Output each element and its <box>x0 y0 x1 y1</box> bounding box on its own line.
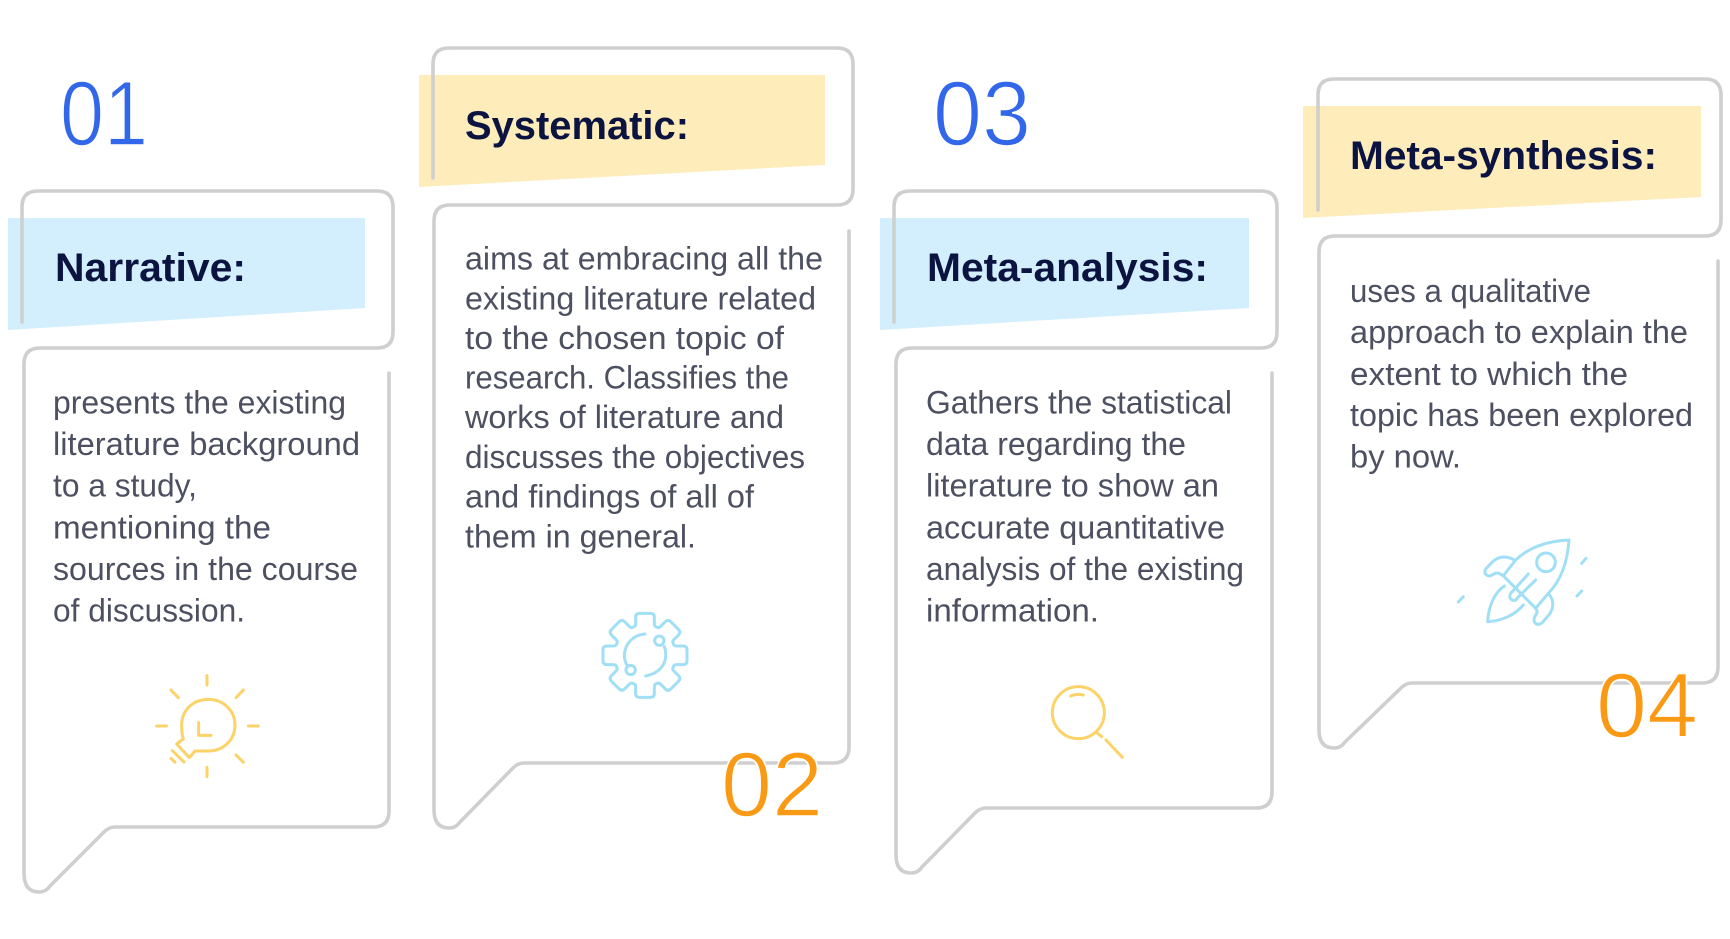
text block: Meta-analysis description: accurate quantitative <box>926 510 1225 546</box>
text block: Narrative description: sources in the course <box>53 551 358 587</box>
text block: Systematic description: them in general. <box>465 518 696 554</box>
card outline: Narrative <box>22 191 393 892</box>
text block: Meta-synthesis description: extent to which the <box>1350 356 1628 392</box>
card outline: Meta-analysis <box>894 191 1277 873</box>
icon: light bulb with clock <box>157 676 258 777</box>
text block: Systematic description: discusses the objectives <box>465 439 805 475</box>
text block: Systematic description: and findings of all of <box>465 478 754 514</box>
number 03: 03 <box>933 63 1031 165</box>
heading: Narrative: Narrative: <box>55 246 246 290</box>
text block: Meta-analysis description: data regarding the <box>926 426 1186 462</box>
text block: Systematic description: research. Classifies the <box>465 360 789 396</box>
text block: Systematic description: works of literature and <box>464 399 784 435</box>
number 02: 02 <box>721 734 823 836</box>
panel: Narrative card <box>8 63 393 892</box>
text block: Meta-synthesis description <box>1350 273 1693 474</box>
heading band: Meta-analysis <box>880 218 1249 330</box>
text block: Meta-synthesis description: topic has been explored <box>1350 397 1693 433</box>
number 04: 04 <box>1596 655 1698 757</box>
text block: Systematic description: aims at embracing all the <box>465 240 823 276</box>
panel: Systematic card <box>419 48 853 836</box>
card outline: Meta-synthesis <box>1318 79 1721 748</box>
text block: Narrative description: to a study, <box>53 468 197 504</box>
panel: Meta-analysis card <box>880 63 1277 873</box>
text block: Systematic description <box>464 240 823 554</box>
text block: Meta-synthesis description: approach to explain the <box>1350 314 1688 350</box>
text block: Meta-analysis description: literature to show an <box>926 468 1219 504</box>
text block: Meta-analysis description <box>926 384 1244 628</box>
icon: rocket <box>1458 540 1586 624</box>
heading: Meta-synthesis: Meta-synthesis: <box>1350 134 1657 178</box>
text block: Meta-synthesis description: uses a qualitative <box>1350 273 1591 309</box>
panel: Meta-synthesis card <box>1303 79 1721 757</box>
icon: gear <box>603 613 687 697</box>
heading band: Narrative <box>8 218 365 330</box>
text block: Narrative description: mentioning the <box>53 510 271 546</box>
text block: Systematic description: to the chosen topic of <box>465 320 784 356</box>
heading band: Meta-synthesis <box>1303 106 1701 218</box>
heading band: Systematic <box>419 75 825 187</box>
card outline: Systematic <box>433 48 853 828</box>
text block: Systematic description: existing literature related <box>465 280 816 316</box>
text block: Meta-analysis description: Gathers the statistical <box>926 384 1232 420</box>
icon: magnifying glass <box>1052 687 1122 757</box>
heading: Meta-analysis: Meta-analysis: <box>927 246 1208 290</box>
text block: Meta-analysis description: analysis of the existing <box>926 551 1244 587</box>
text block: Narrative description: of discussion. <box>53 592 245 628</box>
text block: Narrative description: literature background <box>53 426 360 462</box>
number 01: 01 <box>60 63 148 165</box>
text block: Meta-analysis description: information. <box>926 592 1099 628</box>
heading: Systematic: Systematic: <box>465 104 689 148</box>
text block: Meta-synthesis description: by now. <box>1350 438 1461 474</box>
text block: Narrative description <box>53 384 360 628</box>
text block: Narrative description: presents the existing <box>53 384 346 420</box>
